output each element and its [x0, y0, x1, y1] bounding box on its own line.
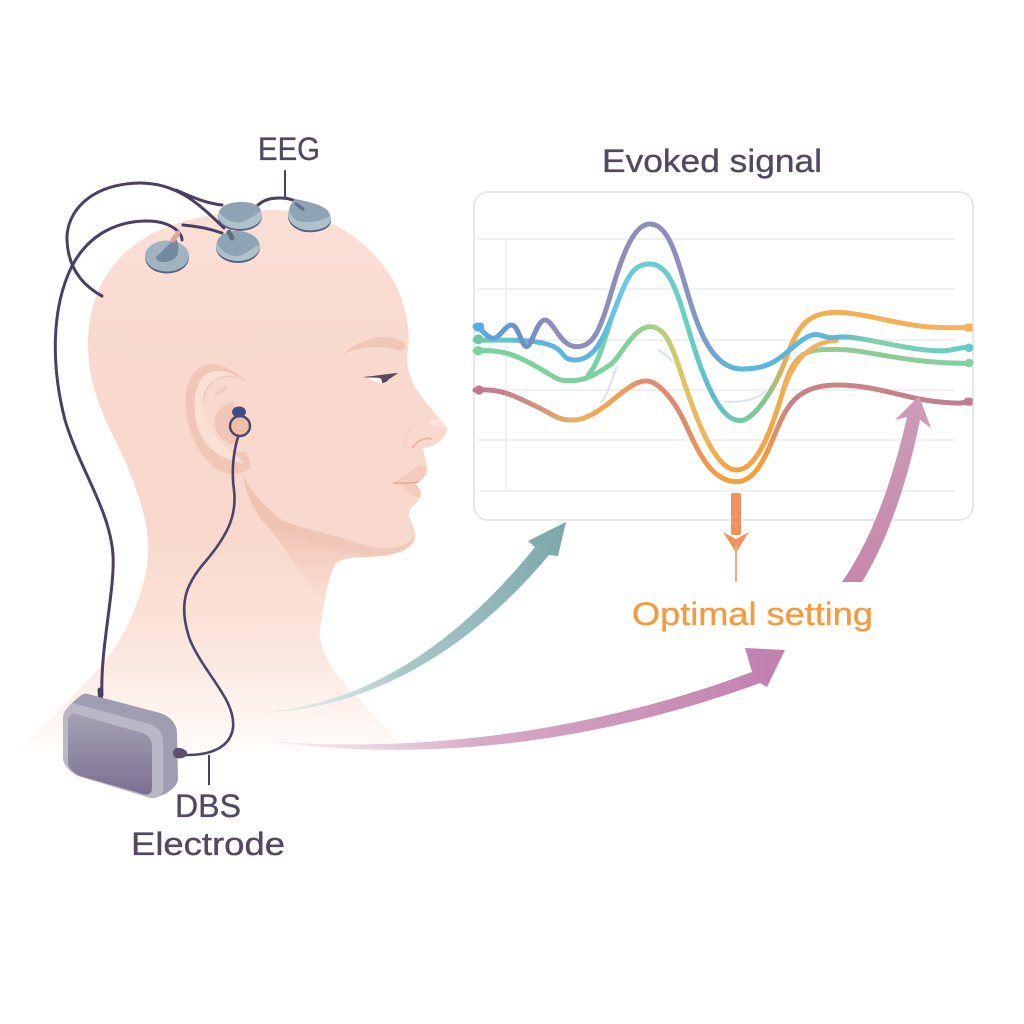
device lead [100, 690, 101, 703]
device screen [68, 714, 152, 795]
lips [394, 465, 427, 498]
heading: Evoked signal: Evoked signal [602, 143, 822, 179]
nose shading [404, 419, 444, 448]
jawline shadow [243, 475, 414, 555]
electrode back right [288, 199, 331, 232]
pulse generator device [63, 690, 187, 798]
wires: EEG leads [55, 171, 297, 695]
ear [186, 364, 250, 474]
jaw and neck shadow [243, 475, 415, 600]
arrow: pink to optimal setting [268, 648, 785, 750]
electrode back center [218, 202, 262, 231]
label: Optimal setting: Optimal setting [632, 596, 873, 632]
electrode front center [216, 231, 260, 263]
device front rim [63, 703, 163, 798]
arrow: pink feedback to chart [842, 396, 931, 582]
signal traces [473, 224, 973, 482]
DBS electrode wire and ear contact [184, 406, 250, 755]
chart panel [473, 192, 973, 520]
trace: purple top [475, 224, 968, 369]
trace: green middle [475, 327, 968, 470]
trace: orange branch [785, 341, 837, 387]
arrow: teal input to chart [258, 522, 566, 713]
device connector [173, 748, 187, 758]
label: EEG: EEG [258, 131, 320, 167]
head silhouette [20, 210, 447, 752]
device body [63, 694, 178, 798]
trace: rust lower [475, 381, 968, 482]
ear contact cap [232, 406, 246, 418]
head and shoulders figure [20, 210, 447, 752]
trace: faint wisps [602, 350, 765, 402]
label: DBS Electrode [131, 788, 285, 862]
leader line: DBS [208, 755, 210, 785]
EEG electrodes [145, 199, 331, 274]
eye [363, 373, 398, 383]
electrode front left [145, 233, 189, 274]
trace end caps [473, 323, 973, 406]
trace: green faint connector [588, 323, 610, 375]
label: DBS Electrode: DBS [175, 788, 241, 824]
arrow: orange marker [723, 493, 749, 582]
trace: teal second [475, 264, 968, 421]
eyebrow [343, 337, 405, 354]
ear contact ring [230, 416, 250, 436]
label: DBS Electrode: Electrode [131, 826, 285, 862]
